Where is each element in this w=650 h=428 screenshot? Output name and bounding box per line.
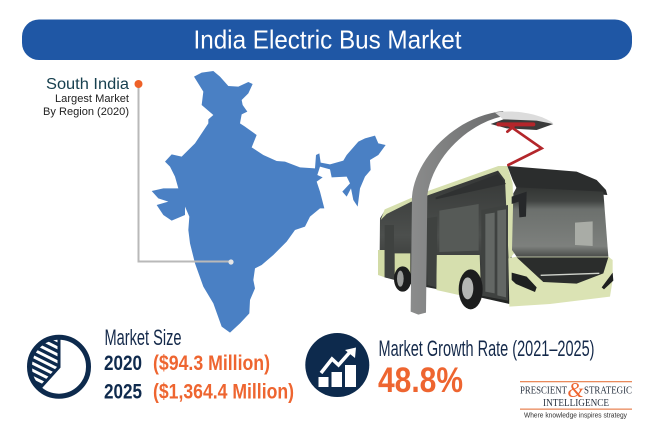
bus rear lower panel xyxy=(378,250,410,285)
charging pole xyxy=(411,111,503,315)
logo: Prescient & Strategic Intelligence: Where knowledge inspires strategy xyxy=(524,410,627,420)
market size 2025 value: ($1,364.4 Million) xyxy=(153,380,294,404)
icon: pie chart xyxy=(27,334,91,399)
market size 2025 value xyxy=(104,380,294,404)
bus doors xyxy=(385,205,508,301)
bus cab interior highlight xyxy=(575,221,593,246)
market size 2020 value: ($94.3 Million) xyxy=(153,352,270,375)
callout: South India label xyxy=(43,76,129,118)
bus front lights xyxy=(512,273,613,292)
bus side window panes xyxy=(439,204,479,252)
mirror xyxy=(512,192,527,217)
market size heading: Market Size xyxy=(104,325,182,350)
title banner: India Electric Bus Market xyxy=(194,24,462,54)
bus windscreen xyxy=(512,187,608,257)
logo: Prescient & Strategic Intelligence xyxy=(520,378,632,420)
bus lower grille xyxy=(517,257,608,284)
bus with charging station xyxy=(378,111,613,315)
map of India xyxy=(152,71,386,333)
bus side dark body xyxy=(380,167,512,304)
charging canopy xyxy=(495,112,553,123)
bus door glass xyxy=(485,209,506,297)
bus roof panel xyxy=(436,174,506,199)
bus front lower green xyxy=(508,257,613,307)
logo: Prescient & Strategic Intelligence: PRESCIENT xyxy=(520,386,567,396)
bus front roof xyxy=(507,166,607,195)
callout: South India label: South India xyxy=(46,76,129,93)
market size 2025 value: 2025 xyxy=(104,380,142,404)
bus front wheel xyxy=(459,269,483,309)
bus rear wheel xyxy=(394,266,411,292)
logo: Prescient & Strategic Intelligence: STRATEGIC xyxy=(584,386,632,396)
callout: South India label: Largest Market xyxy=(55,93,129,105)
bus green roof strip xyxy=(381,166,514,260)
market size 2020 value xyxy=(104,352,270,375)
bus middle lower panel xyxy=(436,255,481,300)
callout: South India label: By Region (2020) xyxy=(43,106,129,118)
red pantograph xyxy=(498,124,542,165)
title banner xyxy=(22,20,632,60)
logo: Prescient & Strategic Intelligence: INTELLIGENCE xyxy=(543,398,609,409)
growth rate value: 48.8% xyxy=(378,361,463,400)
market size 2020 value: 2020 xyxy=(104,352,142,375)
icon: growth chart xyxy=(305,333,369,397)
logo: Prescient & Strategic Intelligence: & xyxy=(567,378,584,402)
leader line from label to South India xyxy=(134,80,234,265)
